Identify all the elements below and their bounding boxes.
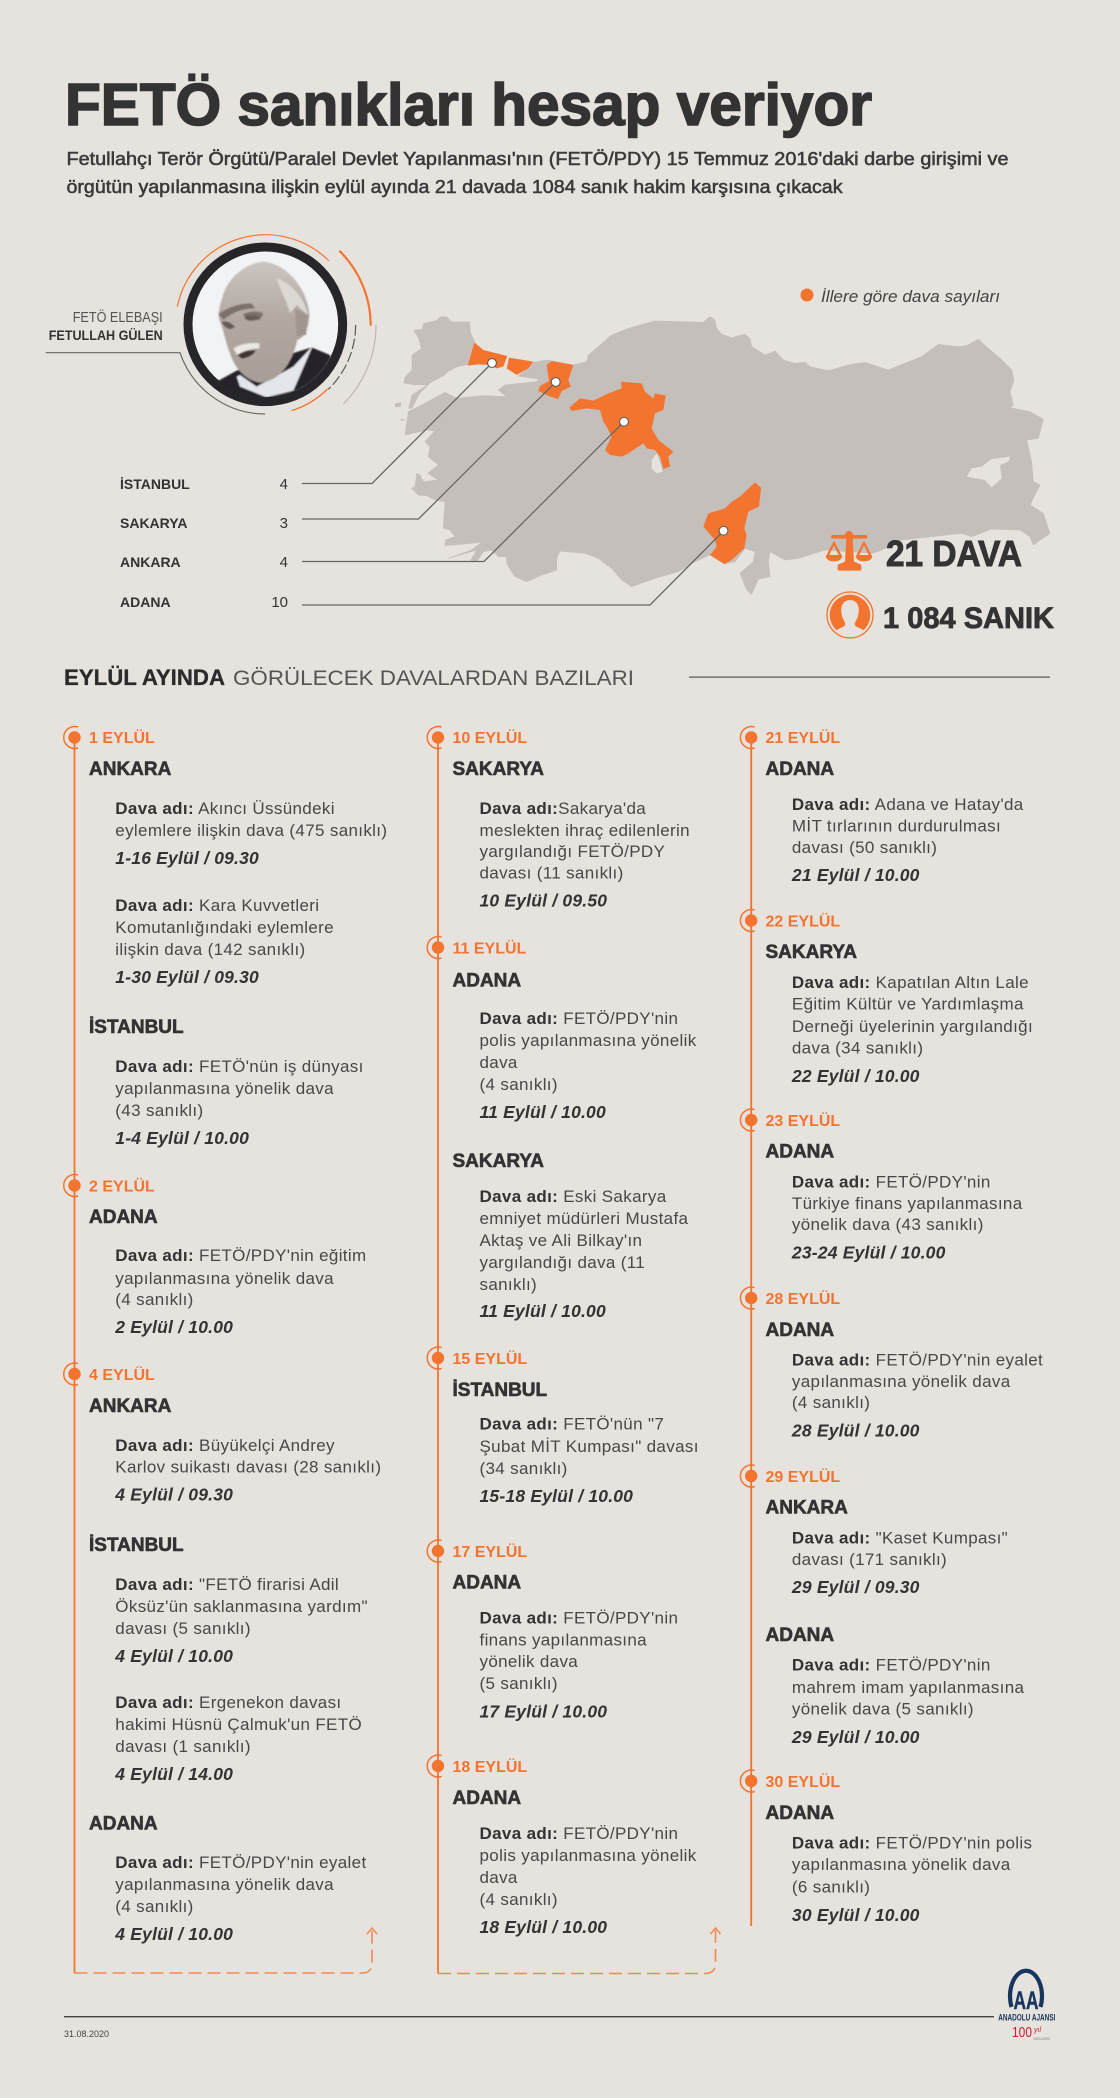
footer date: 31.08.2020 <box>64 2029 109 2039</box>
province: Ankara <box>569 382 673 469</box>
case: Adil Öksüz: Dava adı: "FETÖ firarisi Adil <box>115 1575 339 1594</box>
province: Adana <box>703 482 761 564</box>
case: finans: Dava adı: FETÖ/PDY'nin <box>480 1608 678 1628</box>
case: ihraç: yargılandığı FETÖ/PDY <box>480 842 665 861</box>
case: iş dünyası: Dava adı: FETÖ'nün iş dünyası <box>115 1057 364 1076</box>
date: 1 Eylül <box>64 726 155 748</box>
date: 22 Eylül: 22 EYLÜL <box>766 912 840 930</box>
city: Adana: ADANA <box>766 1803 834 1824</box>
date: 29 Eylül <box>740 1465 840 1487</box>
case: Adil Öksüz: 4 Eylül / 10.00 <box>114 1646 233 1666</box>
city: Adana: ADANA <box>766 1625 834 1646</box>
date: 1 Eylül: 1 EYLÜL <box>89 728 155 747</box>
panel: column 1 <box>64 726 387 1973</box>
city: Adana: ADANA <box>766 1320 834 1341</box>
date: 22 Eylül <box>740 910 840 932</box>
section heading <box>64 665 1050 690</box>
case: eyalet: 28 Eylül / 10.00 <box>791 1420 920 1440</box>
case: eğitim: Dava adı: FETÖ/PDY'nin eğitim <box>115 1246 367 1265</box>
case: Türkiye finans: Türkiye finans yapılanmasına <box>792 1194 1023 1213</box>
case: finans: yönelik dava <box>480 1652 578 1671</box>
row: Adana <box>120 526 728 611</box>
case: MİT Kumpası: 15-18 Eylül / 10.00 <box>480 1486 633 1506</box>
case: MİT tırları: Dava adı: Adana ve Hatay'da <box>792 795 1024 814</box>
case: eyalet: Dava adı: FETÖ/PDY'nin eyalet <box>115 1853 367 1872</box>
case: Altın Lale: Eğitim Kültür ve Yardımlaşma <box>792 994 1024 1014</box>
case: Türkiye finans: Dava adı: FETÖ/PDY'nin <box>792 1172 991 1192</box>
case: polis 2 <box>480 1824 697 1937</box>
city: İstanbul: İSTANBUL <box>89 1535 184 1556</box>
date: 15 Eylül <box>427 1347 527 1369</box>
date: 17 Eylül <box>427 1540 527 1562</box>
case: eyalet: yapılanmasına yönelik dava <box>115 1875 334 1894</box>
city: Adana: ADANA <box>766 1142 834 1162</box>
case: Adil Öksüz <box>114 1575 368 1666</box>
case: eyalet: (4 sanıklı) <box>115 1897 194 1916</box>
case: Türkiye finans: yönelik dava (43 sanıklı) <box>792 1215 984 1234</box>
case: MİT tırları: MİT tırlarının durdurulması <box>792 816 1001 836</box>
case: ihraç <box>480 799 690 910</box>
case: Kaset Kumpası: Dava adı: "Kaset Kumpası" <box>792 1528 1008 1548</box>
logo: Anadolu Ajansı: ANADOLU AJANSI <box>998 2012 1055 2022</box>
case: MİT Kumpası: Dava adı: FETÖ'nün "7 <box>480 1414 664 1434</box>
case: eyalet: Dava adı: FETÖ/PDY'nin eyalet <box>792 1350 1043 1370</box>
case: Karlov <box>114 1436 381 1504</box>
date: 18 Eylül <box>427 1755 527 1777</box>
case: Türkiye finans: 23-24 Eylül / 10.00 <box>791 1242 946 1262</box>
case: Ergenekon <box>114 1693 362 1784</box>
case: Akıncı: eylemlere ilişkin dava (475 sanıklı) <box>115 821 387 840</box>
panel: column 2 <box>427 726 720 1974</box>
city: İstanbul: İSTANBUL <box>452 1380 548 1401</box>
case: Karlov: 4 Eylül / 09.30 <box>114 1484 233 1504</box>
row: Ankara: ANKARA <box>120 554 181 570</box>
case: emniyet: 11 Eylül / 10.00 <box>480 1301 606 1321</box>
province: İstanbul <box>468 342 533 375</box>
case: mahrem imam: Dava adı: FETÖ/PDY'nin <box>792 1656 991 1674</box>
date: 2 Eylül <box>64 1174 155 1196</box>
portrait caption: FETÖ ELEBAŞI <box>73 308 163 326</box>
date: 28 Eylül: 28 EYLÜL <box>766 1289 840 1308</box>
date: 30 Eylül: 30 EYLÜL <box>766 1772 840 1791</box>
case: MİT tırları: 21 Eylül / 10.00 <box>791 865 920 885</box>
date: 17 Eylül: 17 EYLÜL <box>452 1542 527 1561</box>
subtitle <box>66 148 1008 197</box>
case: polis: Dava adı: FETÖ/PDY'nin <box>480 1009 678 1028</box>
case: eyalet: yapılanmasına yönelik dava <box>792 1372 1011 1391</box>
stat: 1 084 sanık <box>827 592 1054 640</box>
case: MİT tırları: davası (50 sanıklı) <box>792 838 937 857</box>
case: polis: polis yapılanmasına yönelik <box>480 1031 697 1050</box>
date: 4 Eylül: 4 EYLÜL <box>89 1365 155 1384</box>
case: MİT Kumpası <box>480 1414 699 1506</box>
city: Sakarya: SAKARYA <box>452 1151 544 1172</box>
date: 10 Eylül: 10 EYLÜL <box>452 728 527 747</box>
case: MİT Kumpası: (34 sanıklı) <box>480 1459 568 1478</box>
case: MİT Kumpası: Şubat MİT Kumpası" davası <box>480 1437 699 1456</box>
province: Sakarya <box>538 361 573 399</box>
case: iş dünyası: 1-4 Eylül / 10.00 <box>115 1128 249 1148</box>
case: mahrem imam: yönelik dava (5 sanıklı) <box>792 1700 974 1718</box>
ring and arcs <box>46 235 376 414</box>
case: Karlov: Dava adı: Büyükelçi Andrey <box>115 1436 335 1455</box>
case: finans: finans yapılanmasına <box>480 1630 647 1650</box>
portrait caption: FETULLAH GÜLEN <box>49 327 163 343</box>
case: polis: 11 Eylül / 10.00 <box>480 1102 606 1122</box>
case: Ergenekon: Dava adı: Ergenekon davası <box>115 1693 342 1712</box>
date: 30 Eylül <box>740 1770 840 1792</box>
case: Adil Öksüz: Öksüz'ün saklanmasına yardım" <box>115 1597 368 1616</box>
row: Sakarya: 3 <box>280 515 288 532</box>
city: Sakarya: SAKARYA <box>452 759 544 780</box>
case: Adil Öksüz: davası (5 sanıklı) <box>115 1619 251 1638</box>
case: polis <box>792 1834 1032 1925</box>
date: 4 Eylül <box>64 1363 155 1385</box>
city: Ankara: ANKARA <box>766 1498 848 1518</box>
row: Sakarya: SAKARYA <box>120 515 187 531</box>
city: İstanbul: İSTANBUL <box>89 1017 184 1038</box>
row: İstanbul: 4 <box>280 476 288 493</box>
case: mahrem imam <box>791 1656 1025 1747</box>
icon: person <box>827 592 873 640</box>
map: Turkey <box>395 317 1050 594</box>
case: eyalet: (4 sanıklı) <box>792 1393 870 1412</box>
photo <box>190 249 340 407</box>
case: iş dünyası <box>115 1057 364 1148</box>
case: Kaset Kumpası <box>791 1528 1008 1597</box>
panel: column 3 <box>740 726 1043 1926</box>
timeline 1 with dashed arrow <box>74 737 377 1973</box>
case: Akıncı: 1-16 Eylül / 09.30 <box>115 848 259 868</box>
case: iş dünyası: yapılanmasına yönelik dava <box>115 1079 334 1098</box>
city: Adana: ADANA <box>89 1814 158 1834</box>
footer rule <box>64 2016 994 2017</box>
case: eyalet <box>114 1853 367 1944</box>
case: polis 2: 18 Eylül / 10.00 <box>480 1917 607 1937</box>
case: Kaset Kumpası: davası (171 sanıklı) <box>792 1550 947 1569</box>
case: emniyet: Dava adı: Eski Sakarya <box>480 1187 667 1206</box>
case: eğitim: 2 Eylül / 10.00 <box>114 1317 233 1337</box>
row: İstanbul: İSTANBUL <box>120 476 190 492</box>
case: polis: Dava adı: FETÖ/PDY'nin polis <box>792 1834 1032 1852</box>
case: eyalet <box>791 1350 1043 1440</box>
case: finans <box>480 1608 678 1722</box>
date: 29 Eylül: 29 EYLÜL <box>766 1467 840 1486</box>
case: eğitim <box>114 1246 367 1337</box>
case: MİT tırları <box>791 795 1024 885</box>
case: eğitim: yapılanmasına yönelik dava <box>115 1269 334 1288</box>
date: 28 Eylül <box>740 1287 840 1309</box>
case: Türkiye finans <box>791 1172 1023 1262</box>
portrait: Fetullah Gülen <box>46 235 376 414</box>
logo: Anadolu Ajansı: yıl <box>1033 2027 1041 2034</box>
date: 23 Eylül: 23 EYLÜL <box>766 1111 840 1130</box>
logo: Anadolu Ajansı: 1920-2020 <box>1033 2037 1050 2041</box>
case: polis: dava <box>480 1053 518 1072</box>
stat: 1 084 sanık: 1 084 SANIK <box>883 602 1054 635</box>
city: Adana: ADANA <box>452 1788 521 1809</box>
case: Akıncı: Dava adı: Akıncı Üssündeki <box>115 799 335 818</box>
case: ihraç: davası (11 sanıklı) <box>480 864 624 882</box>
section heading: EYLÜL AYINDA <box>64 665 225 690</box>
case: Kara Kuvvetleri <box>115 896 334 987</box>
case: Karlov: Karlov suikastı davası (28 sanıklı) <box>115 1458 381 1476</box>
city: Adana: ADANA <box>89 1207 158 1228</box>
row: Sakarya <box>120 378 560 532</box>
province table <box>120 359 728 611</box>
row: İstanbul <box>120 359 496 493</box>
city: Sakarya: SAKARYA <box>766 942 857 963</box>
subtitle: örgütün yapılanmasına ilişkin eylül ayında 21 davada 1084 sanık hakim karşısına çıkacak <box>66 176 843 197</box>
case: polis <box>480 1009 697 1122</box>
logo: Anadolu Ajansı <box>998 1971 1055 2041</box>
legend: İllere göre dava sayıları <box>821 287 1000 306</box>
case: polis 2: (4 sanıklı) <box>480 1890 558 1909</box>
case: Ergenekon: 4 Eylül / 14.00 <box>114 1764 233 1784</box>
stat: 21 dava: 21 DAVA <box>886 533 1022 574</box>
case: mahrem imam: mahrem imam yapılanmasına <box>792 1678 1025 1697</box>
case: eyalet: 4 Eylül / 10.00 <box>114 1924 233 1944</box>
case: polis 2: Dava adı: FETÖ/PDY'nin <box>480 1824 678 1843</box>
date: 10 Eylül <box>427 726 527 748</box>
case: emniyet: emniyet müdürleri Mustafa <box>480 1209 689 1228</box>
city: Adana: ADANA <box>452 970 521 992</box>
case: polis: (4 sanıklı) <box>480 1075 558 1094</box>
case: emniyet: sanıklı) <box>480 1275 537 1294</box>
case: polis 2: dava <box>480 1868 518 1887</box>
logo: Anadolu Ajansı: AA <box>1014 1987 1038 2015</box>
case: Kara Kuvvetleri: Dava adı: Kara Kuvvetleri <box>115 896 319 915</box>
case: Altın Lale <box>791 973 1033 1086</box>
row: Ankara: 4 <box>280 554 288 571</box>
case: Kara Kuvvetleri: Komutanlığındaki eylemlere <box>115 918 334 937</box>
case: polis: (6 sanıklı) <box>792 1878 870 1896</box>
case: iş dünyası: (43 sanıklı) <box>115 1101 203 1120</box>
case: ihraç: meslekten ihraç edilenlerin <box>480 821 690 840</box>
date: 11 Eylül: 11 EYLÜL <box>452 938 527 958</box>
case: emniyet <box>480 1187 689 1321</box>
city: Adana: ADANA <box>452 1572 521 1594</box>
case: ihraç: 10 Eylül / 09.50 <box>480 890 607 910</box>
case: mahrem imam: 29 Eylül / 10.00 <box>791 1727 920 1747</box>
stat: 21 dava <box>826 531 1022 574</box>
case: finans: 17 Eylül / 10.00 <box>480 1702 607 1722</box>
row: Ankara <box>120 417 628 571</box>
date: 23 Eylül <box>740 1109 840 1131</box>
case: Ergenekon: davası (1 sanıklı) <box>115 1737 251 1756</box>
case: eğitim: (4 sanıklı) <box>115 1290 194 1309</box>
case: ihraç: Dava adı:Sakarya'da <box>480 799 646 818</box>
date: 11 Eylül <box>427 936 527 958</box>
city: Ankara: ANKARA <box>89 759 172 780</box>
case: Kaset Kumpası: 29 Eylül / 09.30 <box>791 1577 920 1597</box>
case: Altın Lale: Dava adı: Kapatılan Altın Lale <box>792 973 1029 992</box>
case: polis: 30 Eylül / 10.00 <box>792 1905 920 1925</box>
section heading: GÖRÜLECEK DAVALARDAN BAZILARI <box>233 667 634 690</box>
subtitle: Fetullahçı Terör Örgütü/Paralel Devlet Yapılanması'nın (FETÖ/PDY) 15 Temmuz 2016'daki darbe girişimi ve <box>66 148 1008 169</box>
title: FETÖ sanıkları hesap veriyor <box>65 72 872 138</box>
case: Altın Lale: dava (34 sanıklı) <box>792 1038 923 1058</box>
case: Kara Kuvvetleri: ilişkin dava (142 sanıklı) <box>115 940 306 959</box>
case: Akıncı <box>115 799 387 868</box>
case: emniyet: Aktaş ve Ali Bilkay'ın <box>480 1231 642 1250</box>
portrait caption <box>49 308 163 343</box>
row: Adana: 10 <box>271 594 288 611</box>
date: 15 Eylül: 15 EYLÜL <box>452 1349 527 1368</box>
city: Adana: ADANA <box>766 759 834 780</box>
case: emniyet: yargılandığı dava (11 <box>480 1253 645 1272</box>
case: Altın Lale: 22 Eylül / 10.00 <box>791 1066 920 1086</box>
case: finans: (5 sanıklı) <box>480 1674 558 1693</box>
timeline 2 with dashed arrow <box>438 737 720 1974</box>
case: Kara Kuvvetleri: 1-30 Eylül / 09.30 <box>115 967 259 987</box>
date: 2 Eylül: 2 EYLÜL <box>89 1176 155 1196</box>
case: polis 2: polis yapılanmasına yönelik <box>480 1846 697 1865</box>
city: Ankara: ANKARA <box>89 1396 172 1417</box>
icon: scales <box>826 531 872 571</box>
timeline 3 <box>750 737 752 1926</box>
row: Adana: ADANA <box>120 594 171 610</box>
date: 21 Eylül <box>740 726 840 748</box>
case: Ergenekon: hakimi Hüsnü Çalmuk'un FETÖ <box>115 1715 362 1734</box>
case: Altın Lale: Derneği üyelerinin yargılandığı <box>792 1017 1033 1036</box>
date: 18 Eylül: 18 EYLÜL <box>452 1757 527 1776</box>
case: polis: yapılanmasına yönelik dava <box>792 1855 1011 1874</box>
date: 21 Eylül: 21 EYLÜL <box>766 728 840 747</box>
logo: Anadolu Ajansı: 100 <box>1012 2024 1032 2041</box>
